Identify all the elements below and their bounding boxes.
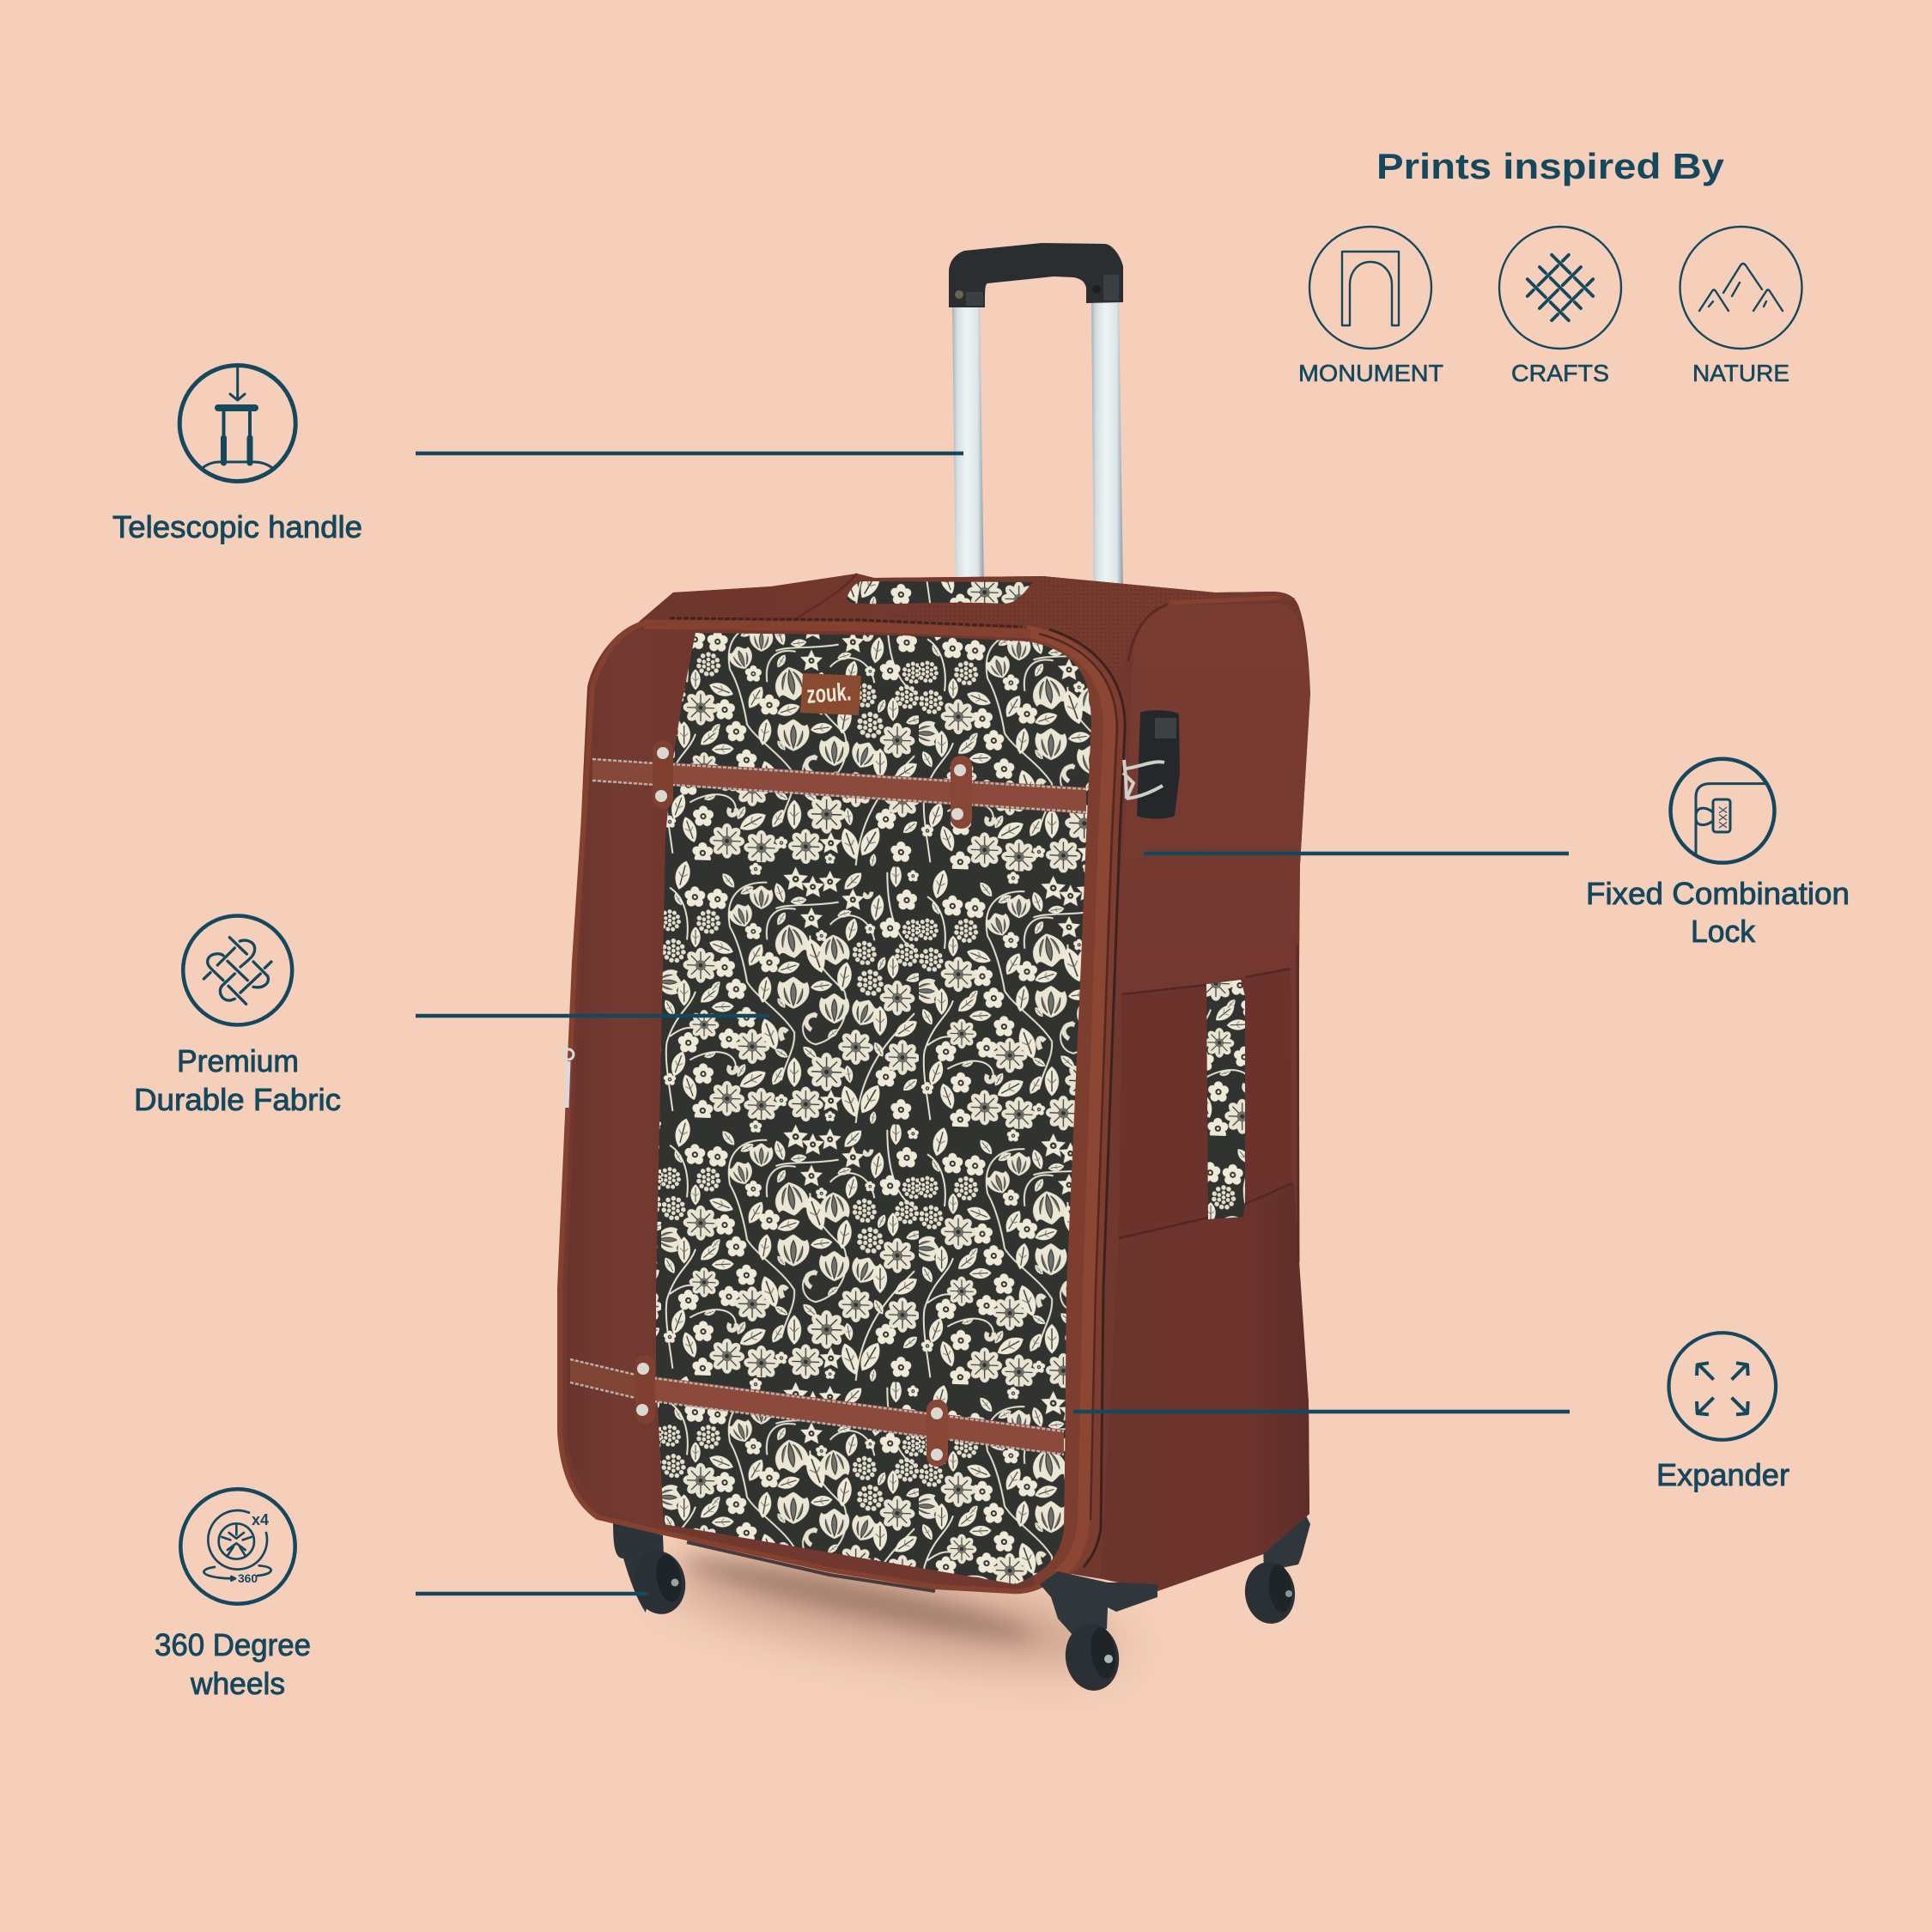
outer rim bbox=[560, 622, 1058, 1591]
underside edge bbox=[687, 1542, 935, 1591]
floor shadow bbox=[658, 1539, 1128, 1686]
icon: woven lattice bbox=[1499, 227, 1621, 349]
lower leather strap bbox=[570, 1355, 1064, 1467]
label: Fixed Combination: Fixed Combination bbox=[1586, 876, 1850, 911]
label: NATURE: NATURE bbox=[1692, 360, 1789, 386]
icon: wheel bbox=[180, 1489, 295, 1604]
title: Prints inspired By: Prints inspired By bbox=[1376, 146, 1725, 186]
zipper band bbox=[1026, 629, 1125, 1589]
icon: woven knot bbox=[183, 915, 292, 1025]
combination lock bbox=[1123, 710, 1180, 818]
label: wheels: wheels bbox=[190, 1666, 285, 1701]
label: MONUMENT: MONUMENT bbox=[1298, 360, 1443, 386]
feature: 360 degree wheels bbox=[155, 1489, 311, 1701]
upper leather strap bbox=[592, 740, 1086, 829]
label: Telescopic handle: Telescopic handle bbox=[112, 509, 362, 544]
leader line: lock bbox=[1144, 852, 1569, 855]
label: 360 Degree: 360 Degree bbox=[155, 1627, 311, 1662]
icon: telescopic handle bbox=[179, 366, 295, 481]
feature: fixed combination lock bbox=[1586, 759, 1850, 949]
top face bbox=[638, 574, 1296, 672]
icon: mountains bbox=[1680, 227, 1801, 349]
rear right wheel bbox=[1242, 1516, 1310, 1626]
front right wheel bbox=[1040, 1571, 1157, 1694]
icon: combination lock: XXX bbox=[1716, 806, 1729, 829]
icon: monument arch bbox=[1309, 227, 1431, 349]
icon: expand arrows bbox=[1669, 1333, 1776, 1440]
leader line: expander bbox=[1073, 1410, 1570, 1413]
leader line: wheels bbox=[416, 1592, 648, 1595]
floral print panel bbox=[656, 633, 1091, 1584]
print inspiration: monument bbox=[1298, 227, 1443, 386]
label: Premium: Premium bbox=[177, 1043, 299, 1078]
leader line: telescopic handle bbox=[416, 452, 963, 455]
top rim with stitched seam bbox=[644, 618, 1030, 634]
suitcase silhouette bbox=[560, 574, 1310, 1591]
side face lower bbox=[1101, 1183, 1309, 1591]
rear left wheel bbox=[613, 1522, 690, 1619]
label: Lock: Lock bbox=[1691, 914, 1756, 949]
icon: wheel: 360 bbox=[238, 1572, 258, 1585]
label: CRAFTS: CRAFTS bbox=[1511, 360, 1609, 386]
brand patch bbox=[800, 673, 861, 715]
label: Expander: Expander bbox=[1656, 1457, 1789, 1492]
brand patch: zouk. bbox=[805, 678, 852, 709]
icon: combination lock bbox=[1671, 759, 1774, 863]
side face upper bbox=[1112, 604, 1310, 996]
front left strip bbox=[567, 627, 697, 1528]
print inspiration: nature bbox=[1680, 227, 1801, 386]
side face recess bbox=[1119, 969, 1292, 1238]
print inspiration: crafts bbox=[1499, 227, 1621, 386]
feature: premium durable fabric bbox=[134, 915, 341, 1117]
suitcase bbox=[560, 243, 1310, 1694]
side carry handle bbox=[1206, 980, 1245, 1219]
leader line: fabric bbox=[416, 1014, 769, 1018]
feature: telescopic handle bbox=[112, 366, 362, 544]
side zip pull bbox=[563, 1049, 574, 1108]
icon: wheel: x4 bbox=[252, 1511, 269, 1528]
label: Durable Fabric: Durable Fabric bbox=[134, 1082, 341, 1117]
top carry handle bbox=[847, 581, 1033, 604]
telescopic handle tubes and grip bbox=[949, 243, 1123, 592]
feature: expander bbox=[1656, 1333, 1789, 1492]
